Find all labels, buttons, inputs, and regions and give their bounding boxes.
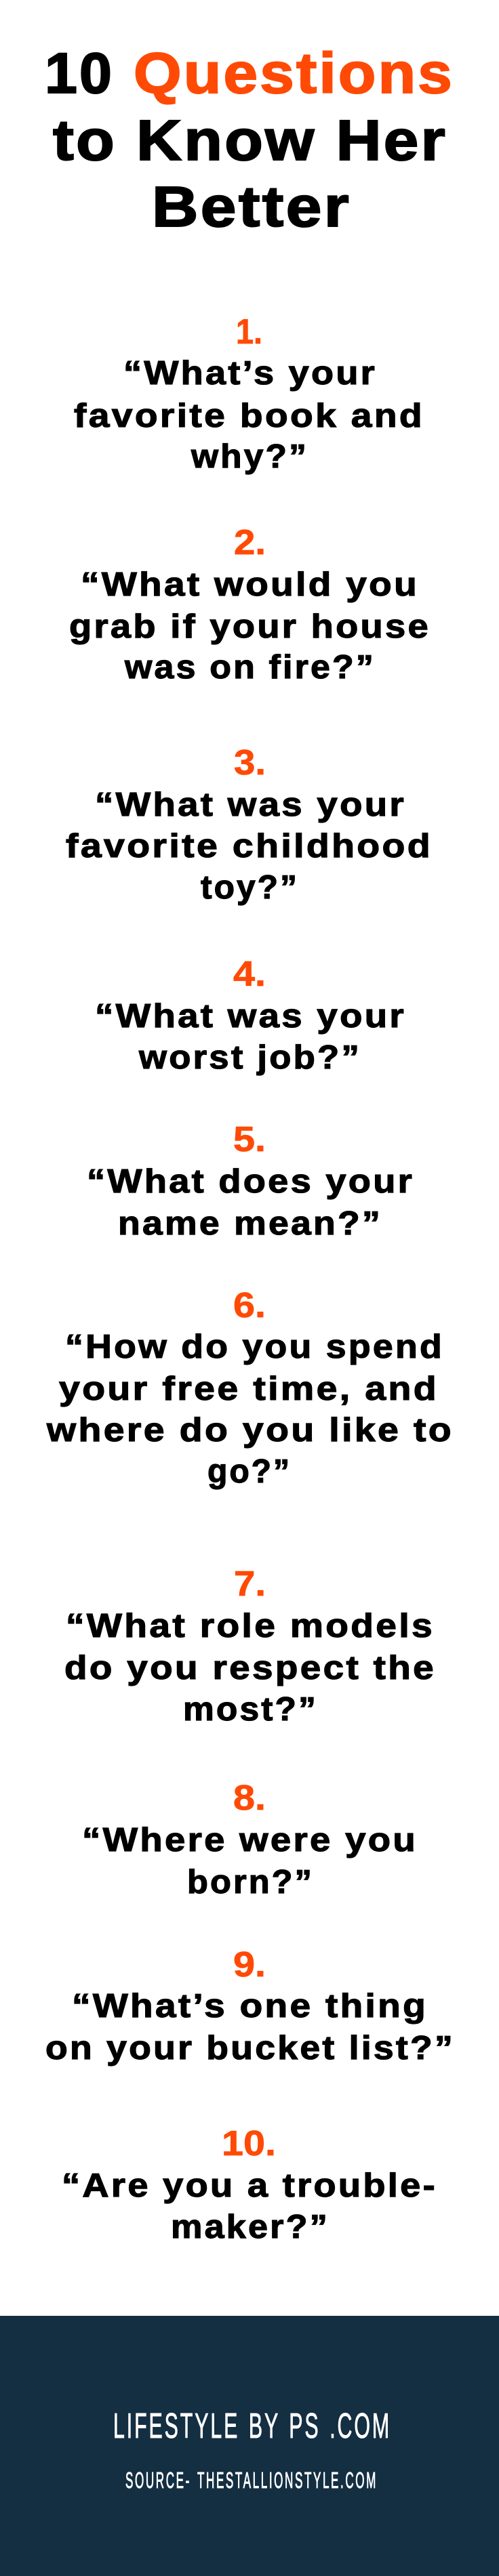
question 2: was on fire?”: [124, 648, 376, 686]
question 7: 7.: [234, 1564, 266, 1604]
title: 10: [45, 41, 114, 105]
footer panel: [0, 2316, 499, 2576]
question 5: “What does your: [87, 1163, 414, 1200]
question 9: [45, 1945, 455, 2066]
question 10: maker?”: [171, 2208, 330, 2245]
title: Better: [152, 175, 351, 238]
question 8: [82, 1779, 418, 1900]
question 8: 8.: [233, 1779, 266, 1818]
title: to Know Her: [53, 108, 447, 172]
question 1: “What’s your: [123, 354, 377, 392]
question 9: on your bucket list?”: [45, 2029, 455, 2066]
question 6: your free time, and: [59, 1370, 439, 1407]
question 3: 3.: [234, 743, 266, 783]
question 3: favorite childhood: [66, 827, 433, 865]
question 7: “What role models: [66, 1607, 435, 1644]
question 7: do you respect the: [64, 1649, 436, 1686]
question 9: “What’s one thing: [72, 1987, 428, 2024]
question 3: “What was your: [95, 786, 406, 823]
question 4: 4.: [233, 955, 266, 994]
question 6: where do you like to: [46, 1411, 454, 1449]
question 4: [95, 955, 406, 1076]
question 2: [69, 523, 431, 686]
question 4: “What was your: [95, 997, 406, 1035]
question 2: grab if your house: [69, 608, 431, 645]
question 6: 6.: [233, 1286, 266, 1325]
question 7: [64, 1564, 436, 1728]
question 1: why?”: [191, 438, 308, 475]
question 10: 10.: [222, 2124, 276, 2163]
question 10: [62, 2124, 437, 2245]
title: Questions: [134, 41, 454, 105]
question 3: toy?”: [201, 869, 299, 906]
question 6: go?”: [207, 1453, 292, 1490]
question 7: most?”: [183, 1690, 318, 1728]
question 1: [74, 312, 424, 475]
question 5: name mean?”: [118, 1205, 382, 1242]
question 8: “Where were you: [82, 1821, 418, 1858]
question 9: 9.: [233, 1945, 266, 1985]
question 2: 2.: [234, 523, 266, 562]
question 6: [46, 1286, 454, 1490]
question 10: “Are you a trouble-: [62, 2167, 437, 2204]
question 2: “What would you: [81, 566, 419, 603]
question 1: favorite book and: [74, 397, 424, 434]
question 5: 5.: [233, 1120, 266, 1159]
question 5: [87, 1120, 414, 1242]
question 6: “How do you spend: [65, 1328, 444, 1365]
question 3: [66, 743, 433, 906]
question 1: 1.: [236, 312, 262, 352]
question 4: worst job?”: [138, 1039, 361, 1076]
question 8: born?”: [187, 1863, 314, 1900]
title: [45, 41, 454, 238]
